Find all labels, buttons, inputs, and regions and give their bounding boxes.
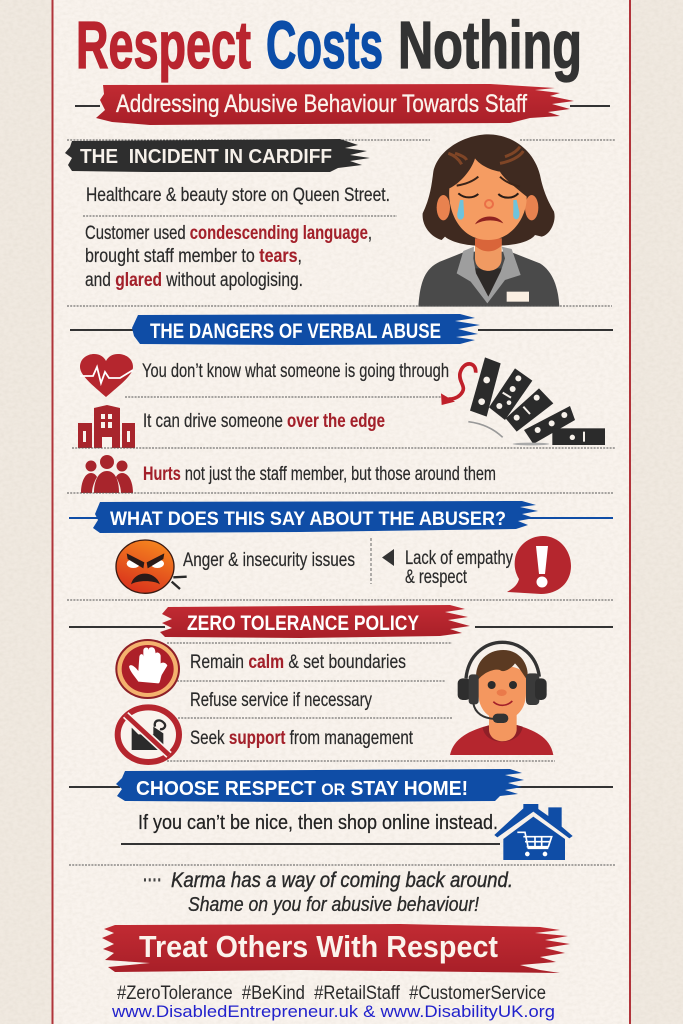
- heading: what does this say about the abuser: [69, 501, 613, 533]
- panel: the incident in Cardiff: [65, 134, 615, 307]
- panel: the dangers of verbal abuse: [70, 314, 615, 493]
- text: lack of empathy: [405, 548, 513, 588]
- icon: heart with pulse: [80, 354, 133, 397]
- panel: choose respect or stay home: [69, 769, 613, 860]
- text: store location: Healthcare & beauty store on Queen Street.: [86, 185, 390, 206]
- title: Nothing: [398, 8, 582, 83]
- subtitle banner: Addressing Abusive Behaviour Towards Staff: [116, 90, 527, 118]
- text: going through: You don’t know what someone is going through: [142, 361, 449, 382]
- text: karma message: Shame on you for abusive behaviour!: [188, 894, 479, 916]
- heading: what does this say about the abuser: WHAT DOES THIS SAY ABOUT THE ABUSER?: [110, 508, 506, 530]
- text: seek support: Seek support from management: [190, 728, 414, 749]
- website links: www.DisabledEntrepreneur.uk & www.DisabilityUK.org: [111, 1002, 555, 1021]
- text: over the edge: It can drive someone over the edge: [143, 411, 385, 432]
- text: anger and insecurity: Anger & insecurity issues: [183, 550, 355, 571]
- heading: choose respect or stay home: [69, 769, 613, 802]
- icon: exclamation bubble: [507, 536, 571, 594]
- text: lack of empathy: & respect: [405, 567, 468, 588]
- heading: the dangers of verbal abuse: [70, 314, 613, 345]
- hashtags: #ZeroTolerance #BeKind #RetailStaff #CustomerService: [117, 983, 546, 1004]
- text: lack of empathy: Lack of empathy: [405, 548, 513, 569]
- icon: house with shopping cart: [494, 804, 573, 860]
- text: what the customer did: Customer used condescending language,: [85, 223, 372, 244]
- heading: zero tolerance policy: ZERO TOLERANCE POLICY: [187, 612, 419, 635]
- title: [76, 8, 582, 83]
- icon: support agent with headset: [450, 642, 553, 755]
- text: what the customer did: brought staff member to tears,: [85, 246, 302, 267]
- heading: choose respect or stay home: CHOOSE RESPECT OR STAY HOME!: [136, 777, 468, 800]
- icon: angry face: [116, 540, 187, 593]
- banner: treat others with respect: Treat Others With Respect: [139, 929, 498, 964]
- text: what the customer did: and glared without apologising.: [85, 270, 303, 291]
- banner: treat others with respect: [102, 924, 570, 973]
- text: remain calm: Remain calm & set boundaries: [190, 652, 406, 673]
- text: refuse service: Refuse service if necessary: [190, 690, 372, 711]
- text: karma message: ····: [143, 869, 162, 892]
- icon: hospital building: [78, 405, 135, 448]
- icon: left arrow: [382, 549, 394, 566]
- icon: falling dominoes: [441, 357, 605, 445]
- text: shop online: If you can’t be nice, then shop online instead.: [138, 812, 498, 834]
- heading: zero tolerance policy: [69, 605, 613, 638]
- icon: crying staff member: [418, 134, 559, 307]
- text: karma message: [143, 869, 513, 916]
- heading: the incident in Cardiff: [65, 139, 370, 172]
- heading: the dangers of verbal abuse: THE DANGERS OF VERBAL ABUSE: [150, 320, 441, 343]
- icon: no service sign: [118, 707, 179, 762]
- icon: group of people: [81, 455, 133, 493]
- title: Costs: [266, 8, 383, 83]
- heading: the incident in Cardiff: THE INCIDENT IN CARDIFF: [80, 146, 332, 168]
- panel: what does this say about the abuser: [69, 501, 613, 594]
- panel: zero tolerance policy: [69, 605, 613, 762]
- subtitle banner: [75, 84, 610, 125]
- icon: stop hand: [115, 639, 180, 699]
- title: Respect: [76, 8, 251, 83]
- text: hurts those around them: Hurts not just the staff member, but those around them: [143, 464, 496, 485]
- text: what the customer did: [85, 223, 372, 291]
- text: karma message: Karma has a way of coming back around.: [171, 869, 513, 892]
